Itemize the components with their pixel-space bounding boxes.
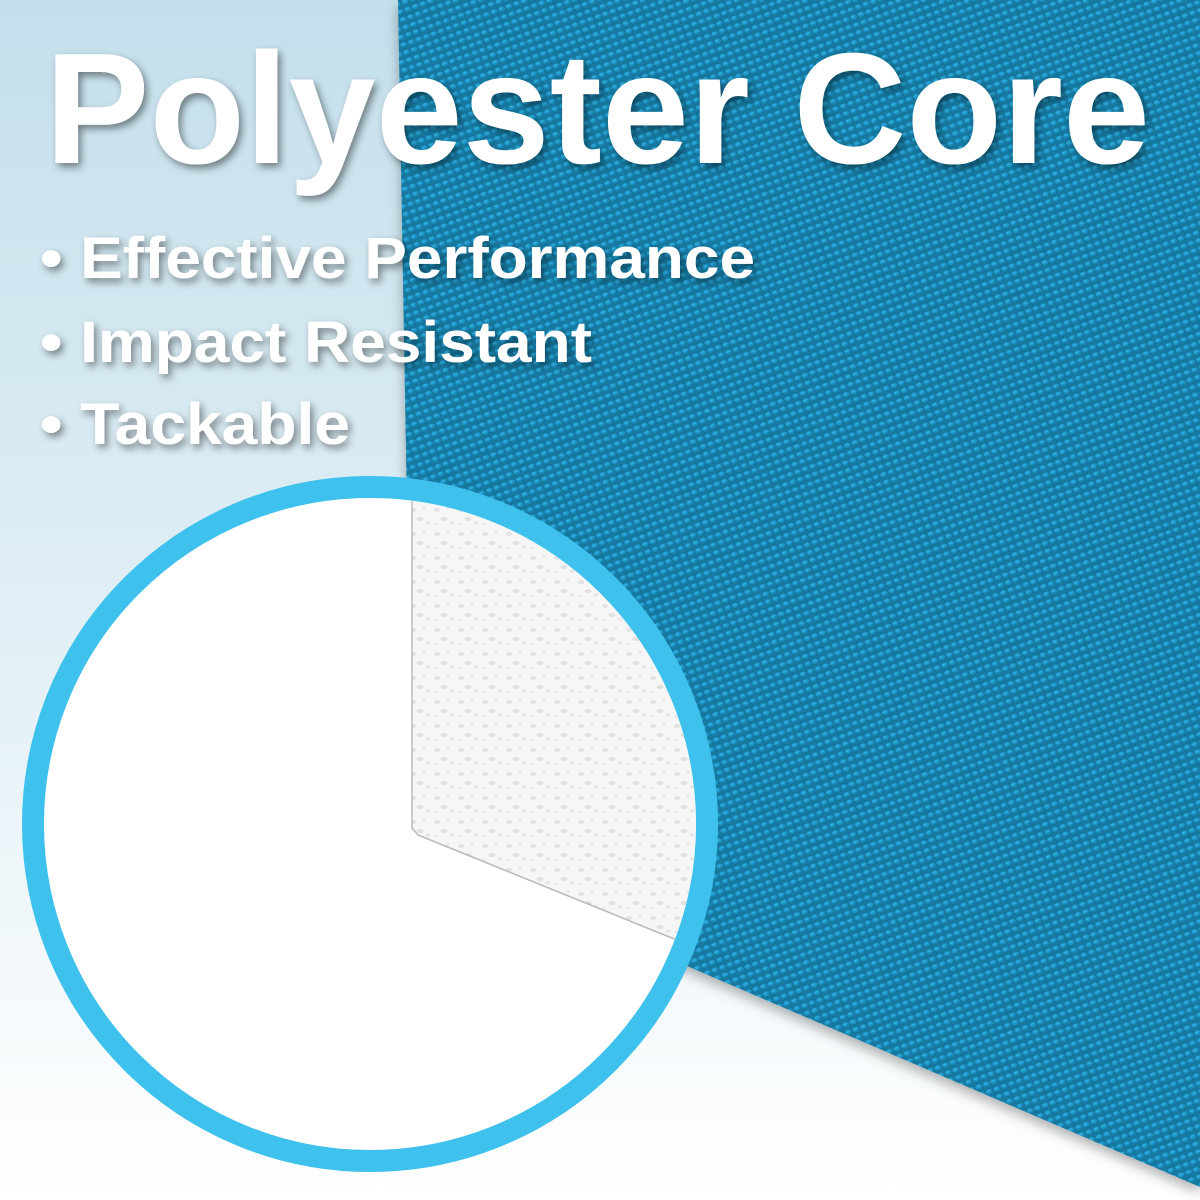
circle magnifier [33,470,800,1161]
bullet: impact resistant: • Impact Resistant [40,310,592,375]
bullet list [40,226,755,457]
bullet: tackable: • Tackable [40,392,350,457]
foam core layer [411,500,696,940]
title: Polyester Core [45,21,1150,197]
panel: blue fabric board [398,0,1200,1187]
bullet: effective performance: • Effective Performance [40,226,755,291]
